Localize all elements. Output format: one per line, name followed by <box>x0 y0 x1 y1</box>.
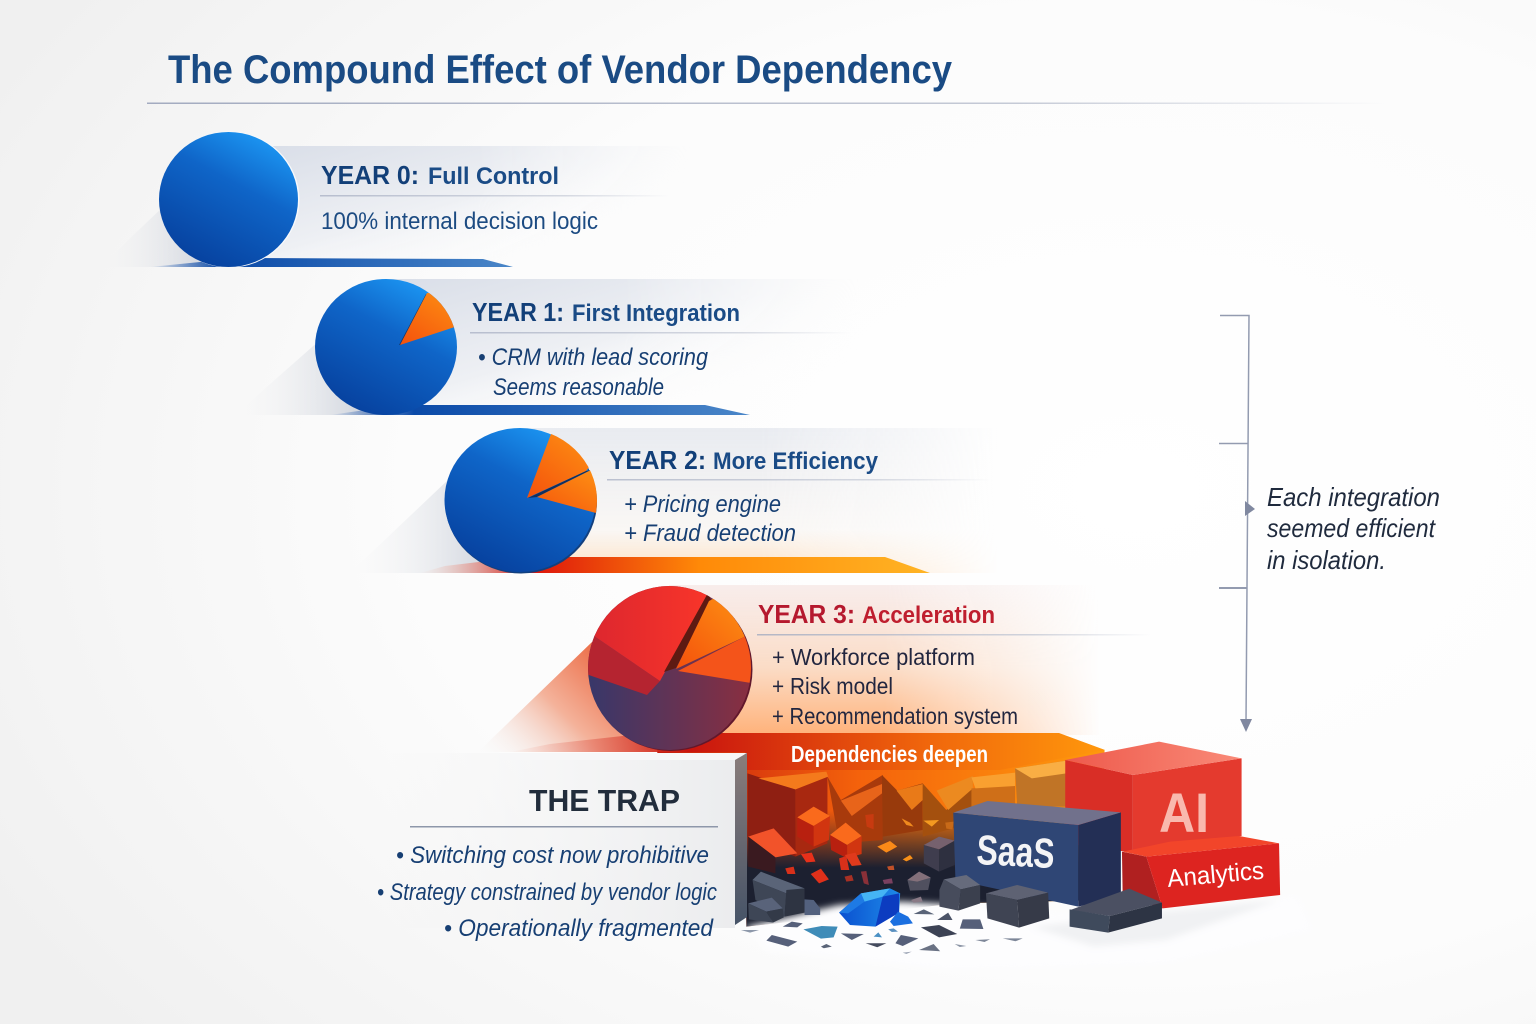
year 2 base bar <box>420 557 930 573</box>
year 2 text <box>624 491 796 547</box>
blue gem <box>839 888 913 927</box>
step: year 2 <box>403 428 974 574</box>
year 0 heading: YEAR 0: <box>321 160 419 190</box>
year 1 text: • CRM with lead scoring <box>478 344 709 371</box>
step: year 1 <box>286 279 828 415</box>
block label: SaaS: SaaS <box>976 826 1056 877</box>
block label: Analytics: Analytics <box>1166 857 1265 893</box>
side note: Each integration <box>1267 482 1440 512</box>
year 2 shadow wedge <box>350 478 530 573</box>
trap bullets: • Switching cost now prohibitive <box>396 842 709 869</box>
side note: seemed efficient <box>1267 513 1437 543</box>
year 0 band <box>270 146 590 257</box>
right grey stones <box>939 875 1162 933</box>
year 1 heading: YEAR 1: <box>472 297 564 327</box>
year 2 text: + Fraud detection <box>624 520 796 547</box>
year 3 pie <box>588 586 752 751</box>
year 3 text <box>772 644 1018 729</box>
trap bullets: • Strategy constrained by vendor logic <box>377 879 717 906</box>
step: year 3 <box>478 570 1152 927</box>
the trap panel <box>377 753 747 942</box>
year 0 shadow wedge <box>100 205 240 267</box>
trap bullets: • Operationally fragmented <box>444 915 714 942</box>
year 3 text: + Recommendation system <box>772 703 1018 729</box>
year 3 heading: YEAR 3: <box>758 599 855 629</box>
year 0 base bar <box>150 258 513 267</box>
left grey stones <box>748 872 931 923</box>
trap bullets <box>377 842 717 942</box>
year 0 heading: Full Control <box>428 163 559 190</box>
year 2 heading <box>609 445 879 475</box>
analytics slab <box>1122 836 1280 908</box>
year 3 heading: Acceleration <box>862 602 995 629</box>
year 3 shadow wedge <box>478 642 660 752</box>
orange city blocks <box>747 761 1066 885</box>
shards <box>741 897 1023 954</box>
side note <box>1267 482 1440 575</box>
title: The Compound Effect of Vendor Dependency <box>168 48 953 92</box>
trap heading: THE TRAP <box>529 783 680 818</box>
year 2 pie <box>444 428 597 574</box>
year 1 heading: First Integration <box>572 300 740 327</box>
year 0 text: 100% internal decision logic <box>321 208 598 235</box>
purple block <box>924 837 955 872</box>
year 1 text: Seems reasonable <box>493 374 664 401</box>
year 3 text: + Workforce platform <box>772 644 975 670</box>
year 2 heading: More Efficiency <box>713 448 879 475</box>
chasm behind the trap <box>657 733 1105 927</box>
year 3 band <box>669 585 1100 735</box>
year 1 pie <box>315 279 457 415</box>
block label: AI: AI <box>1159 781 1209 844</box>
year 2 heading: YEAR 2: <box>609 445 706 475</box>
vendor blocks and rubble <box>741 742 1312 970</box>
dependencies deepen label: Dependencies deepen <box>791 741 988 767</box>
year 1 heading <box>472 297 740 327</box>
year 1 text <box>478 344 709 401</box>
year 3 heading <box>758 599 995 629</box>
year 0 pie <box>159 132 300 268</box>
year 2 band <box>520 428 1000 573</box>
year 3 text: + Risk model <box>772 673 893 699</box>
year 2 text: + Pricing engine <box>624 491 781 518</box>
bracket arrow <box>1219 316 1255 732</box>
ai cube <box>1065 742 1242 853</box>
side note: in isolation. <box>1267 545 1386 575</box>
step: year 0 <box>147 132 650 267</box>
saas block <box>953 801 1121 907</box>
year 0 heading <box>321 160 559 190</box>
floor <box>746 897 1312 970</box>
year 1 shadow wedge <box>235 340 400 415</box>
year 1 base bar <box>330 405 750 415</box>
year 1 band <box>388 279 750 405</box>
year 3 base bar <box>510 733 1105 770</box>
